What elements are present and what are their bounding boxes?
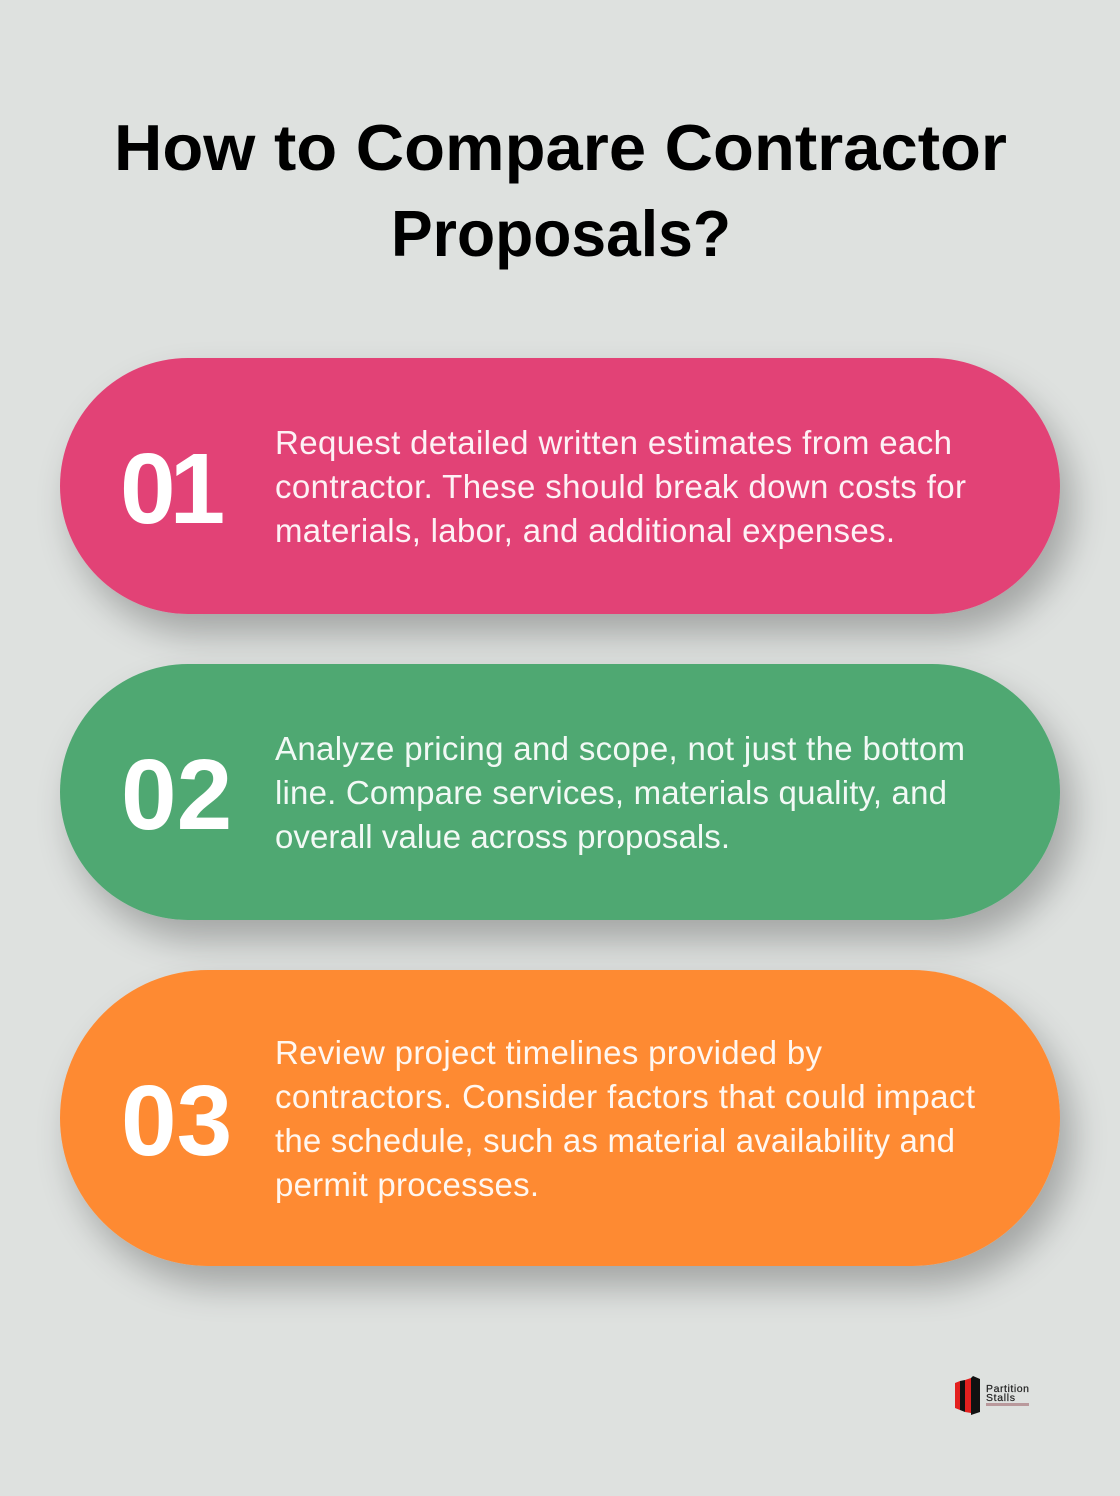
text block: step 02 — [275, 730, 965, 855]
text block: step 02: overall value across proposals. — [275, 818, 730, 855]
text block: step 03: permit processes. — [275, 1166, 539, 1203]
text block: step 03 — [275, 1034, 975, 1203]
text block: step 03: Review project timelines provided by — [275, 1034, 822, 1071]
text block: step 01 — [275, 424, 966, 549]
pill background: step 02 — [60, 664, 1060, 920]
title: How to Compare Contractor — [114, 111, 1007, 184]
panel: step 02 — [60, 664, 1060, 920]
text block: step 03: contractors. Consider factors that could impact — [275, 1078, 975, 1115]
text block: step 01: contractor. These should break down costs for — [275, 468, 966, 505]
title: Proposals? — [391, 197, 731, 270]
pill background: step 03 — [60, 970, 1060, 1266]
text block: step 01: materials, labor, and additional expenses. — [275, 512, 895, 549]
panel: step 03 — [60, 970, 1060, 1266]
text block: step 02: line. Compare services, materials quality, and — [275, 774, 947, 811]
text block: step 01: Request detailed written estimates from each — [275, 424, 952, 461]
icon: partition bars — [955, 1376, 980, 1415]
logo: Partition Stalls — [955, 1376, 1029, 1415]
pill background: step 01 — [60, 358, 1060, 614]
title — [114, 111, 1007, 270]
logo wordmark: Partition — [986, 1383, 1029, 1395]
panel: step 01 — [60, 358, 1060, 614]
number: 01: 01 — [120, 433, 225, 545]
logo: Partition Stalls: Stalls — [986, 1392, 1015, 1404]
text block: step 03: the schedule, such as material availability and — [275, 1122, 955, 1159]
number: 03: 03 — [121, 1065, 232, 1177]
text block: step 02: Analyze pricing and scope, not just the bottom — [275, 730, 965, 767]
number: 02: 02 — [121, 739, 232, 851]
